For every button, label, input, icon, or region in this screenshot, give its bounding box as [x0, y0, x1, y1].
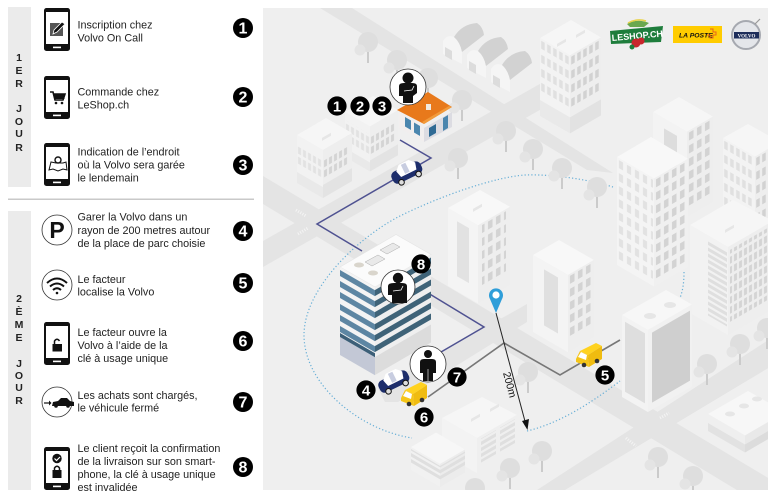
day band: 2ème jour: È	[15, 305, 23, 318]
logo: Volvo: VOLVO	[738, 34, 755, 39]
panel: second day	[8, 211, 253, 494]
day band: 1er jour: R	[15, 142, 23, 154]
building: dark panel tower	[622, 302, 690, 412]
persona: postman	[410, 346, 446, 382]
logo: LeShop.ch	[610, 20, 663, 50]
map badges: 2	[356, 98, 364, 115]
day band: 2ème jour: O	[15, 370, 23, 382]
badge: 8	[233, 457, 253, 477]
delivery radius dotted line	[304, 175, 684, 438]
day band: 1er jour: E	[15, 65, 23, 77]
building: second tower	[534, 240, 593, 336]
van: on the way	[576, 343, 602, 367]
roads	[263, 8, 775, 500]
badge: 5	[233, 273, 253, 293]
text: step 3: le lendemain	[78, 172, 139, 184]
purple customer route	[317, 140, 484, 352]
text: step 4: rayon de 200 metres autour	[78, 225, 211, 237]
text: step 3: où la Volvo sera garée	[78, 159, 185, 171]
grey postman route	[428, 340, 620, 397]
building: blue striped highrise	[340, 234, 431, 375]
building: low pair left	[411, 449, 465, 480]
day band: 1er jour: U	[15, 128, 23, 140]
logo: La Poste	[673, 26, 722, 43]
badge: 3: 3	[239, 158, 248, 174]
badge: 6: 6	[239, 334, 248, 350]
panel: isometric city map	[263, 8, 775, 500]
logo: LeShop.ch: LESHOP.CH	[611, 29, 663, 43]
day band: 1er jour: R	[15, 78, 23, 90]
day band: 2ème jour: 2	[16, 293, 22, 305]
text: step 4: de la place de parc choisie	[78, 238, 205, 250]
icon: wifi	[42, 270, 72, 300]
text: step 8: est invalidée	[78, 482, 138, 494]
badge: 7	[233, 392, 253, 412]
badge: 3	[233, 155, 253, 175]
badge: 2: 2	[239, 90, 248, 106]
icon: phone with form	[44, 8, 70, 51]
badge: 5: 5	[239, 276, 248, 292]
day band: 2ème jour: J	[16, 358, 22, 370]
car: parked at office	[378, 369, 410, 395]
map badges: 5	[601, 367, 609, 384]
logo: Volvo	[732, 19, 760, 49]
car: parked at house	[391, 160, 422, 186]
day band: 2ème jour: U	[15, 382, 23, 394]
text: step 2: LeShop.ch	[78, 100, 129, 112]
arrow: 200m radius: 200m	[500, 371, 519, 399]
badge: 6	[233, 331, 253, 351]
text: step 8: de la livraison sur son smart-	[78, 456, 216, 468]
text: step 4: Garer la Volvo dans un	[78, 211, 187, 223]
text: step 1: Inscription chez	[78, 20, 153, 32]
day band: 2ème jour: E	[15, 332, 23, 344]
crosswalks	[296, 210, 669, 446]
map badges: 6	[420, 409, 428, 426]
map badges: 1	[333, 98, 341, 115]
icon: phone with check and lock	[44, 447, 70, 490]
text: step 6: clé à usage unique	[78, 353, 168, 365]
badge: 1: 1	[239, 20, 248, 38]
building: right large block	[708, 201, 767, 326]
text: step 2: Commande chez	[78, 86, 159, 98]
building: top tall	[540, 20, 601, 133]
day band: 2ème jour: R	[15, 395, 23, 407]
badge: 4: 4	[239, 224, 248, 240]
icon: phone with open lock	[44, 322, 70, 365]
icon: phone with map	[44, 143, 70, 186]
badge: 2	[233, 87, 253, 107]
text: step 6: Volvo à l’aide de la	[78, 340, 168, 352]
day band: 2ème jour: M	[15, 319, 24, 331]
map badges: 4	[362, 382, 371, 399]
text: step 8: phone, la clé à usage unique	[78, 469, 216, 481]
text: step 5: Le facteur	[78, 274, 126, 286]
building: left low 1	[298, 130, 352, 198]
trees	[354, 32, 775, 500]
day band: 1er jour: J	[16, 103, 22, 115]
text: step 6: Le facteur ouvre la	[78, 327, 167, 339]
day band: 1er jour: 1	[16, 52, 22, 64]
panel: first day	[8, 7, 253, 187]
badge: 4	[233, 221, 253, 241]
icon: car loading	[42, 387, 74, 417]
icon: parking: P	[49, 217, 65, 243]
text: step 5: localise la Volvo	[78, 286, 154, 298]
badge: 7: 7	[239, 394, 248, 412]
arrow: 200m radius	[496, 313, 529, 430]
text: step 8: Le client reçoit la confirmation	[78, 443, 220, 455]
day band: 1er jour: O	[15, 116, 23, 128]
map badges: 8	[417, 256, 425, 273]
map badges	[327, 96, 615, 427]
map badges: 3	[378, 98, 386, 115]
text: step 7: Les achats sont chargés,	[78, 390, 198, 402]
building: right tower	[724, 141, 766, 217]
building: low pair right	[471, 404, 515, 462]
house	[397, 92, 452, 142]
building: large centre tower	[617, 137, 688, 286]
day band: 1er jour	[8, 7, 31, 187]
building: pin tower	[449, 190, 510, 285]
map badges: 7	[453, 369, 461, 386]
building: left low 2	[346, 124, 398, 171]
icon: parking	[42, 215, 72, 245]
badge: 1	[233, 18, 253, 38]
persona: customer at office	[381, 270, 415, 304]
building: low right	[708, 396, 768, 452]
hangars	[443, 23, 532, 92]
icon: phone with cart	[44, 76, 70, 119]
text: step 7: le véhicule fermé	[78, 402, 159, 414]
persona: customer at home	[390, 69, 426, 105]
location pin	[489, 288, 503, 313]
text: step 3: Indication de l’endroit	[78, 146, 180, 158]
badge: 8: 8	[239, 460, 248, 476]
text: step 1: Volvo On Call	[78, 32, 143, 44]
building: tower with shaft	[664, 120, 710, 206]
van: at car	[401, 382, 427, 406]
day band: 2ème jour	[8, 211, 31, 490]
logo: La Poste: LA POSTE	[679, 32, 713, 40]
